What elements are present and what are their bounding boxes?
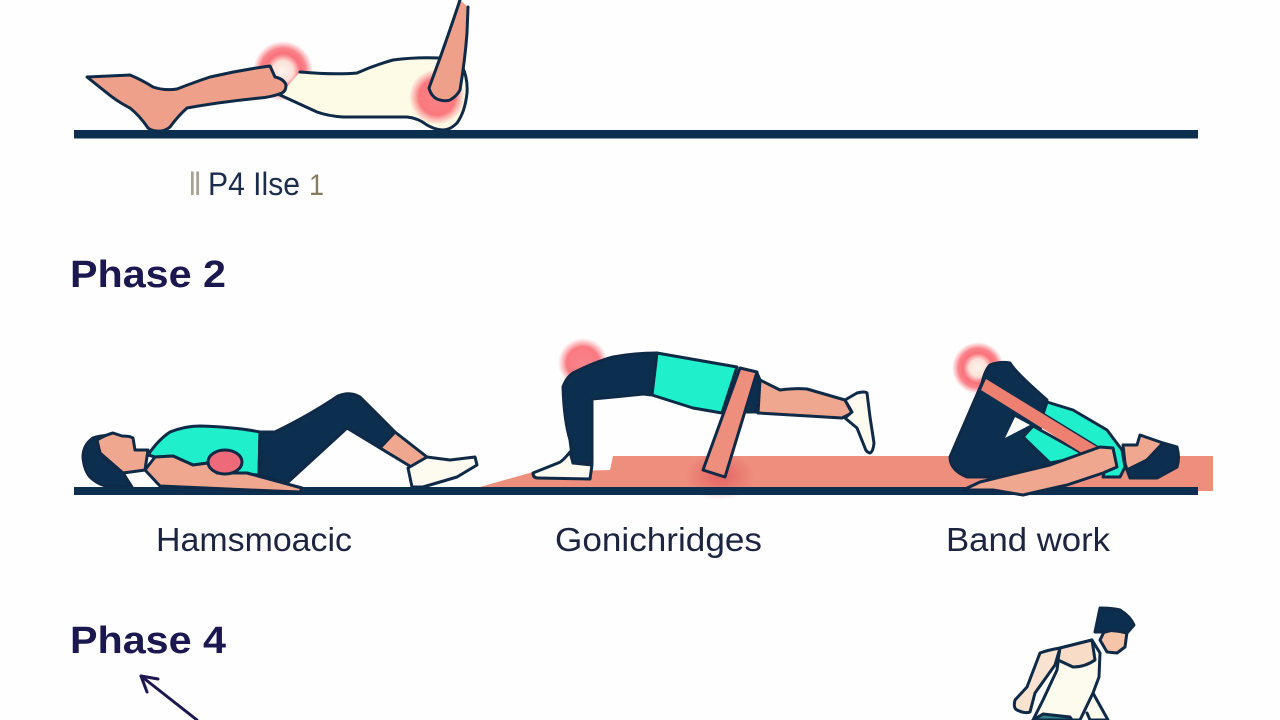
calf (380, 432, 427, 468)
exercise label: Gonichridges: Gonichridges (555, 521, 762, 558)
sock (408, 457, 477, 487)
back foot (533, 452, 592, 479)
garbled phase 1 label: P4 Ilse (208, 166, 300, 202)
pain glow: hand (558, 338, 608, 388)
phase 2 figure: foreground arms and head (145, 435, 1178, 495)
teal midsection (652, 353, 737, 413)
raised foot (845, 392, 874, 453)
back leg (1087, 693, 1108, 720)
pain glow: hip (409, 69, 465, 125)
band figure arm (963, 447, 1117, 495)
arm (1014, 648, 1060, 713)
exercise label: Hamsmoacic: Hamsmoacic (156, 521, 352, 558)
phase 2 figure: supine knee bend (83, 394, 477, 487)
band (981, 379, 1097, 455)
garbled phase 1 label: ‖ (188, 166, 202, 202)
face (1100, 630, 1127, 653)
dark torso and arm (563, 353, 657, 463)
lower leg and foot (87, 66, 286, 131)
torso (1033, 640, 1100, 720)
hair (83, 435, 132, 487)
gap triangle (1005, 417, 1030, 438)
red hand blob (208, 450, 242, 474)
phase 2 figure: single-leg bridge (533, 338, 874, 500)
dark shorts (743, 373, 760, 412)
floor glow (684, 452, 756, 500)
raised limb (429, 0, 468, 101)
raised leg (758, 380, 852, 418)
head and neck (97, 433, 148, 473)
thigh (280, 58, 467, 130)
heading: phase 2: Phase 2 (70, 254, 226, 296)
band figure neck and face (1123, 435, 1163, 470)
phase 2 figure: band work (950, 342, 1125, 477)
pain glow: knee (253, 41, 313, 101)
shirt (148, 426, 260, 475)
teal upper torso (1043, 402, 1125, 477)
phase 4 figure: runner (1014, 608, 1134, 720)
arrow (141, 676, 197, 720)
phase 1 figure: leg raise (87, 0, 468, 131)
pain glow: knee (952, 342, 1004, 394)
hair (1095, 608, 1134, 633)
leggings (259, 394, 395, 483)
shoulder (1058, 640, 1095, 667)
ground line 1 (74, 130, 1198, 138)
ground line 2 (74, 487, 1198, 495)
exercise label: Band work: Band work (946, 521, 1111, 558)
leggings (950, 362, 1056, 477)
garbled phase 1 label: 1 (309, 169, 324, 202)
teal lower torso (1023, 426, 1087, 463)
shorts (1033, 714, 1072, 720)
salmon exercise mat (480, 456, 1213, 491)
band figure hair (1127, 443, 1178, 478)
first figure arm along floor (145, 456, 302, 492)
heading: phase 4: Phase 4 (70, 620, 226, 662)
resistance band (703, 368, 757, 477)
